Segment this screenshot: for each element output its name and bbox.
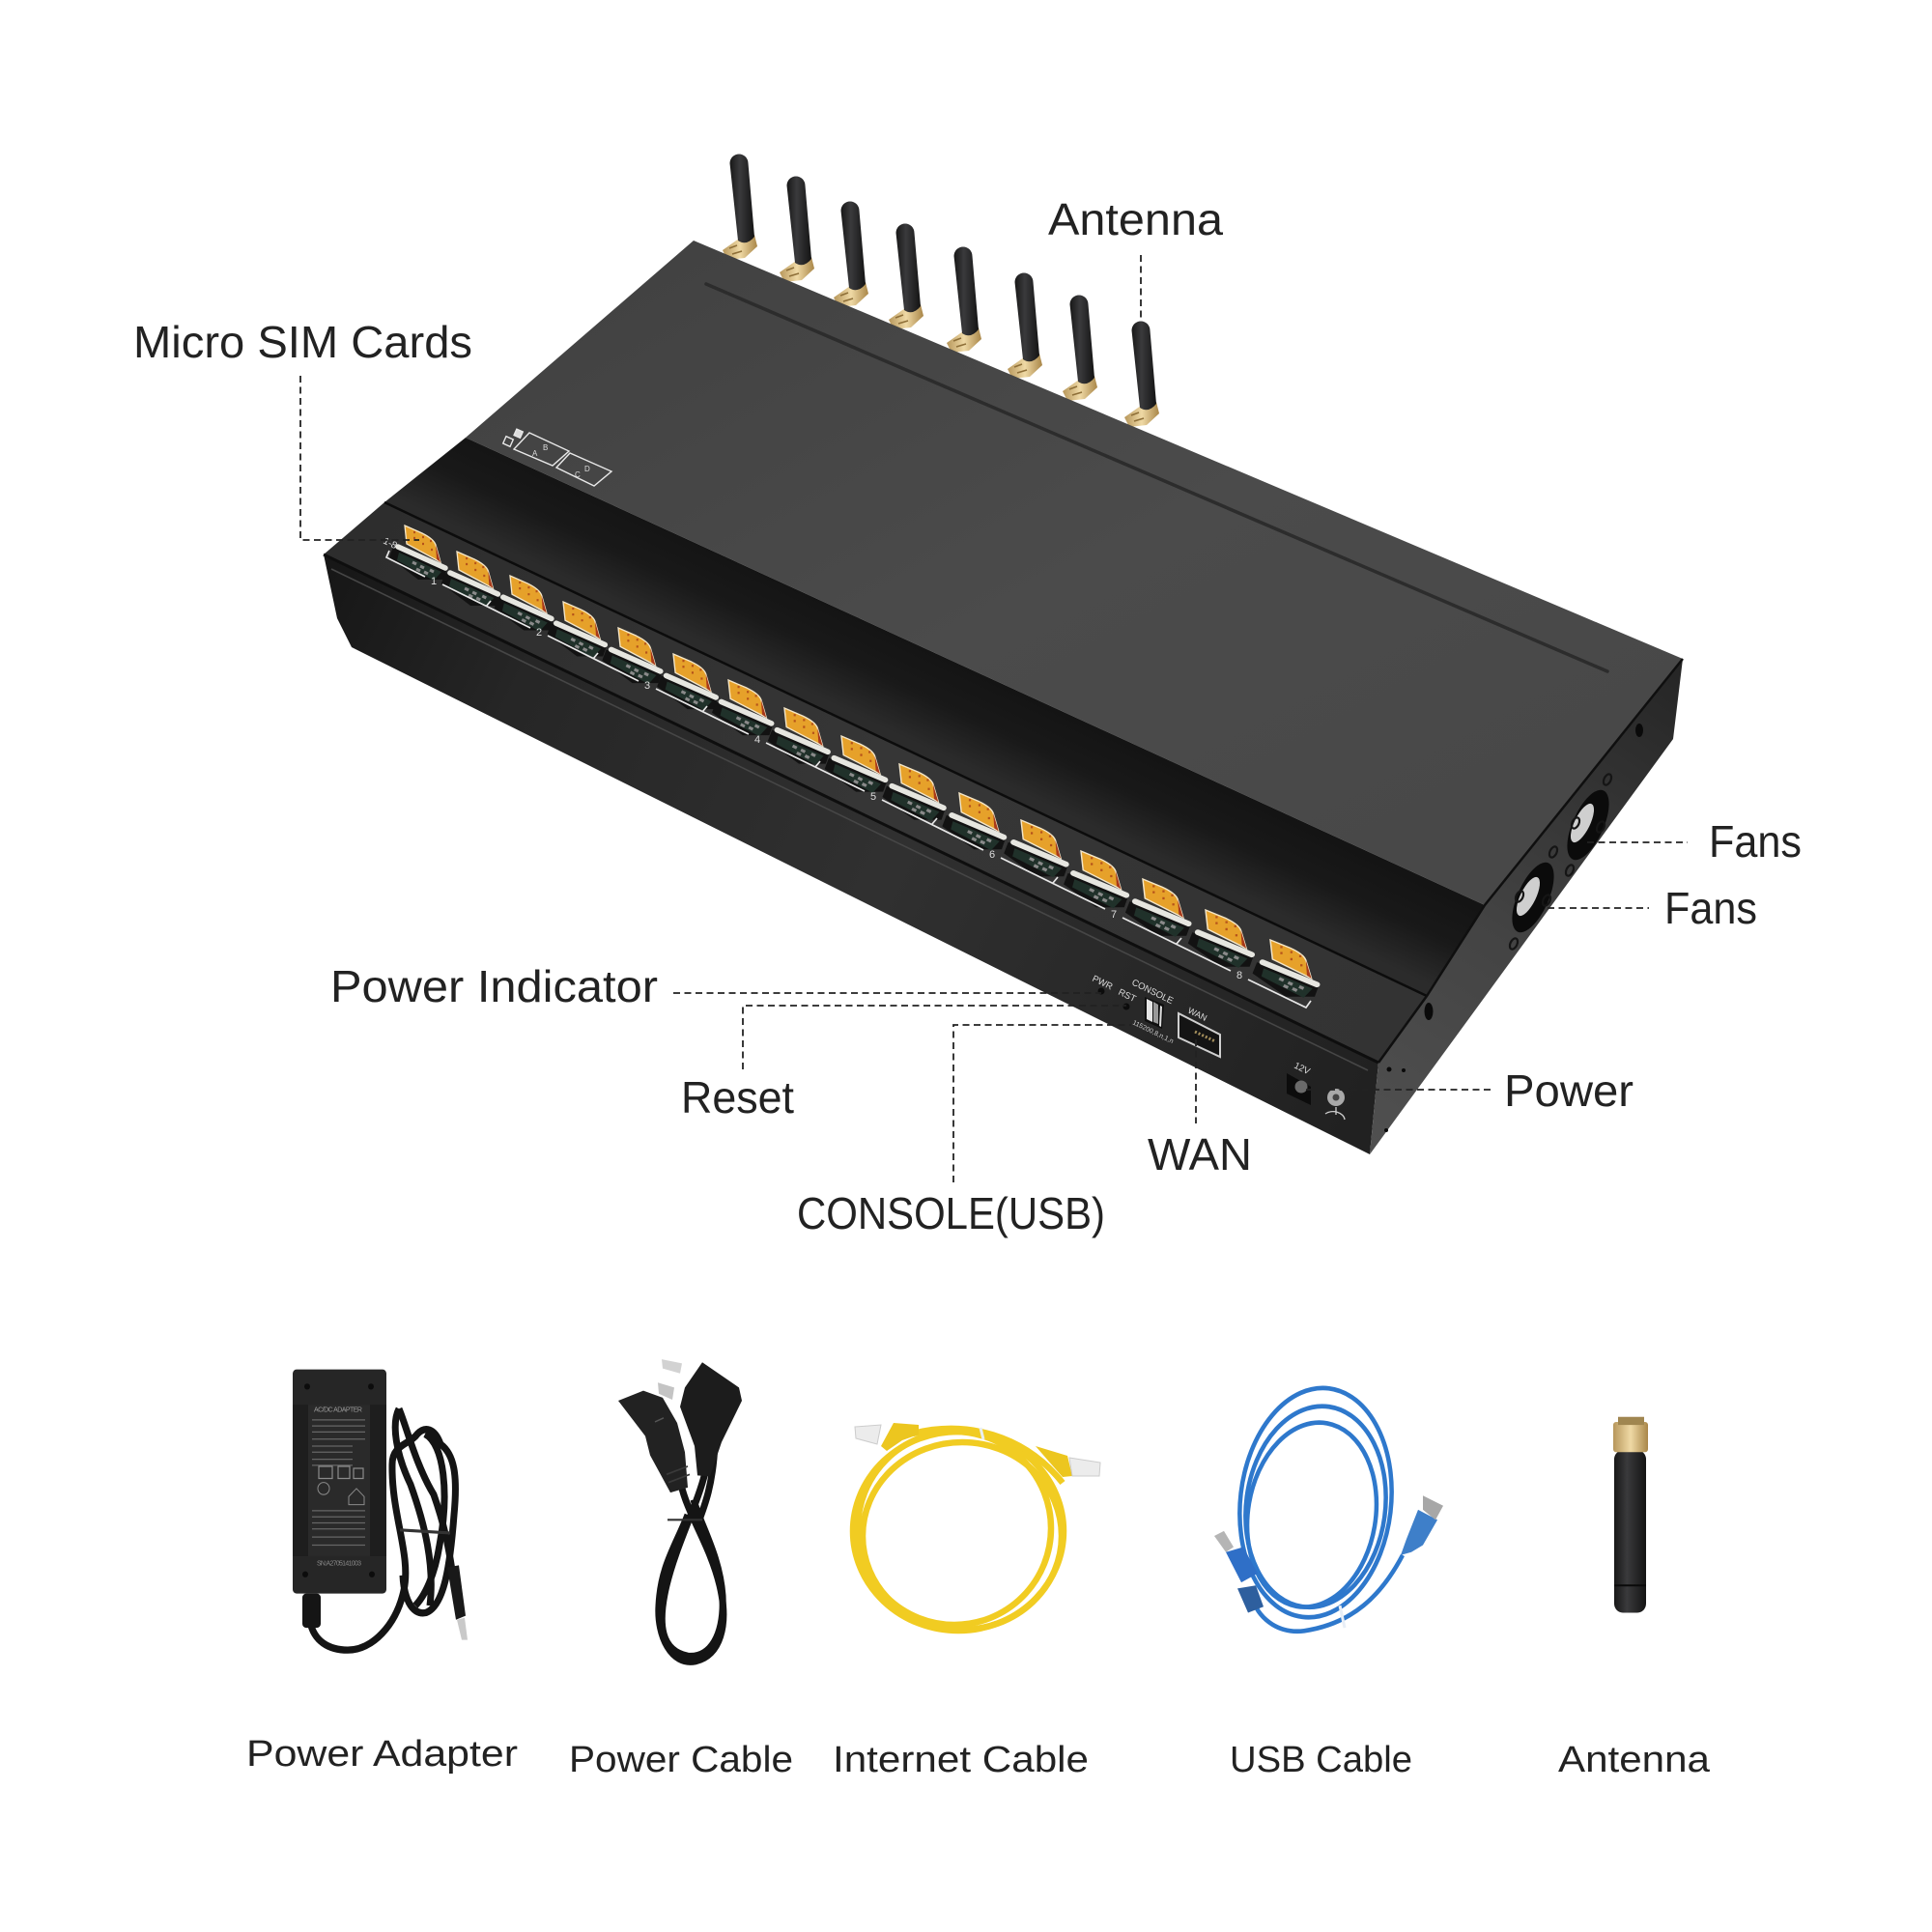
caption: Antenna: Antenna: [1558, 1740, 1711, 1780]
SIM group brackets and numbers: 3: [644, 680, 650, 692]
caption: Internet Cable: Internet Cable: [833, 1740, 1089, 1780]
caption: Power Cable: Power Cable: [569, 1740, 793, 1780]
label: Power: Power: [1504, 1065, 1634, 1116]
accessory: power adapter: SN:A2705141003: [317, 1559, 361, 1567]
front face: [324, 554, 1378, 1154]
product: SIM gateway device: [324, 155, 1683, 1154]
SIM group brackets and numbers: 1-8: [382, 536, 399, 552]
SIM group brackets and numbers: 1: [431, 576, 437, 587]
front panel ports: WAN: [1186, 1006, 1208, 1023]
SIM group brackets and numbers: 7: [1111, 909, 1117, 921]
side screws: [1384, 724, 1643, 1132]
device top lid: [466, 241, 1683, 905]
lid SIM slot markings: C: [575, 470, 581, 479]
label: Fans lower: Fans: [1664, 883, 1757, 933]
SIM group brackets and numbers: 4: [754, 734, 760, 746]
caption: USB Cable: USB Cable: [1230, 1740, 1412, 1780]
front panel ports: PWR: [1091, 974, 1115, 992]
callout lines: [300, 255, 1688, 1182]
SIM strip: [324, 502, 1427, 1063]
label: CONSOLE(USB): CONSOLE(USB): [797, 1188, 1105, 1238]
accessory: power cable: [618, 1359, 742, 1662]
front panel ports: 12V: [1293, 1061, 1312, 1077]
lid SIM slot markings: B: [543, 443, 548, 452]
right side face: [1370, 659, 1683, 1154]
accessory: internet cable: [853, 1423, 1100, 1631]
lid slot: [706, 284, 1607, 671]
accessory: power adapter: [293, 1370, 468, 1650]
caption: Power Adapter: Power Adapter: [246, 1734, 518, 1775]
accessory: USB cable: [1214, 1378, 1443, 1632]
lid SIM slot markings: A: [532, 449, 538, 458]
lid SIM slot markings: [503, 429, 611, 486]
SIM group brackets and numbers: 8: [1236, 970, 1242, 981]
SIM group brackets and numbers: 6: [989, 849, 995, 861]
label: Micro SIM Cards: Micro SIM Cards: [133, 317, 472, 367]
label: Power Indicator: Power Indicator: [330, 961, 658, 1011]
SIM cards row: [389, 526, 1320, 998]
label: Antenna: Antenna: [1048, 194, 1223, 244]
fan bottom: [1504, 845, 1562, 951]
accessory: antenna: [1613, 1417, 1648, 1612]
black band: [384, 438, 1485, 996]
label: Reset: Reset: [681, 1072, 794, 1122]
accessory: power adapter: AC/DC ADAPTER: [314, 1406, 362, 1414]
front panel ports: CONSOLE: [1130, 978, 1175, 1007]
label: Fans upper: Fans: [1709, 816, 1802, 867]
front panel ports: 115200,8,n,1,n: [1131, 1020, 1175, 1045]
SIM group brackets and numbers: 2: [536, 627, 542, 639]
front panel ports: [1091, 974, 1345, 1120]
antennas row: [723, 155, 1159, 427]
label: WAN: WAN: [1148, 1129, 1252, 1179]
SIM group brackets and numbers: [382, 536, 1311, 1008]
front panel ports: RST: [1117, 987, 1138, 1005]
fan top: [1559, 773, 1617, 877]
SIM group brackets and numbers: 5: [870, 791, 876, 803]
lid SIM slot markings: D: [584, 465, 590, 473]
